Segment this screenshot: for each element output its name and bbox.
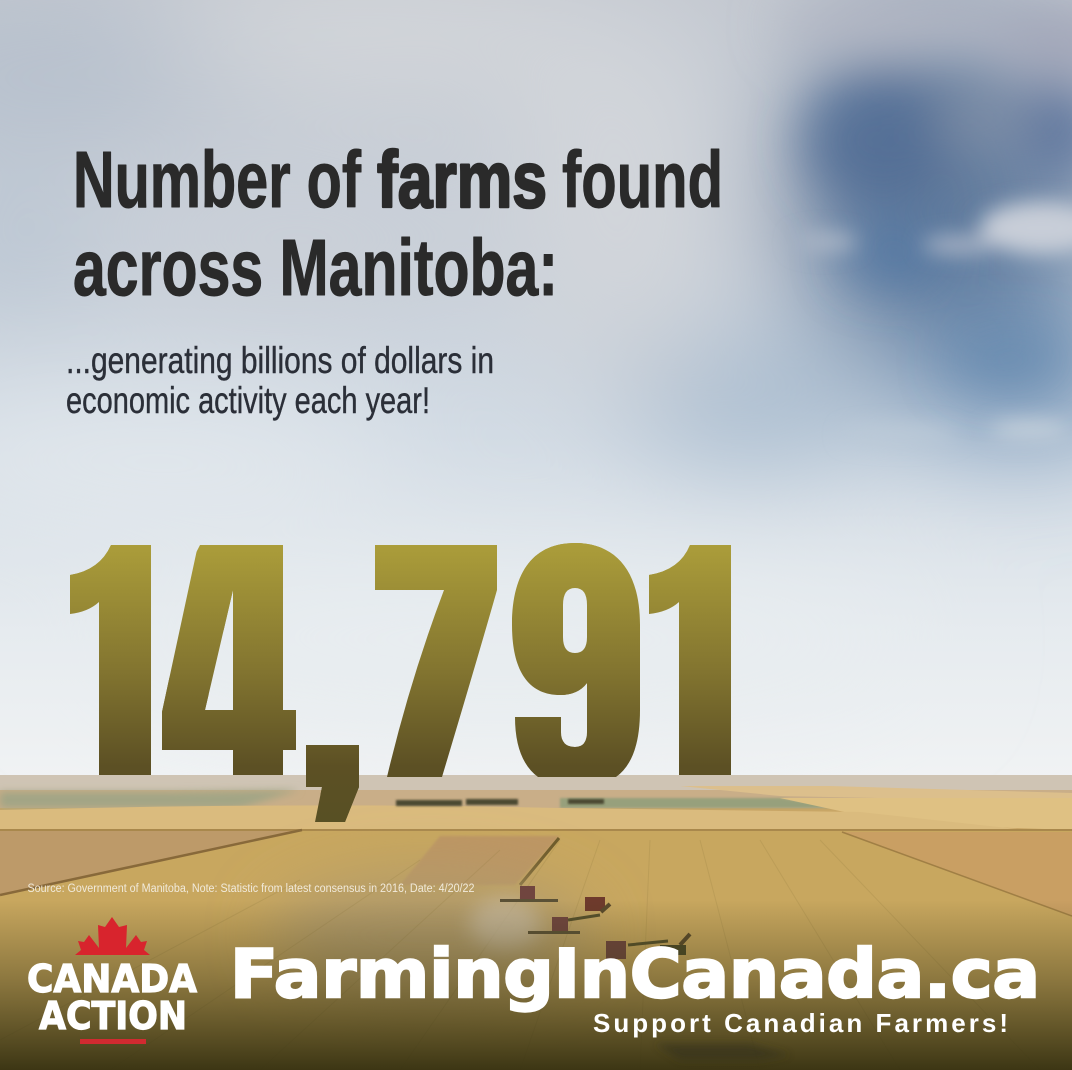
big number 14,791: 1 bbox=[593, 473, 797, 846]
title: farms bbox=[377, 135, 547, 224]
combine harvesters bbox=[500, 886, 690, 959]
icon: red maple leaf bbox=[75, 917, 150, 955]
harvester shadow bbox=[655, 1044, 790, 1060]
big number 14,791: 9 bbox=[504, 474, 649, 846]
logo wordmark bbox=[27, 957, 198, 1038]
harvester dust cloud bbox=[469, 899, 541, 951]
big number 14,791: 1 bbox=[14, 473, 218, 846]
subtitle bbox=[66, 340, 494, 421]
big number 14,791: 4 bbox=[157, 473, 305, 846]
logo wordmark: ACTION bbox=[39, 994, 187, 1038]
tagline: Support Canadian Farmers! bbox=[593, 1008, 1008, 1038]
Canada Action logo bbox=[27, 917, 198, 1044]
background: harvested prairie fields bbox=[0, 775, 1072, 1070]
website name: FarmingInCanada.ca bbox=[230, 935, 1040, 1013]
big number 14,791 bbox=[70, 543, 731, 822]
logo wordmark: CANADA bbox=[27, 957, 198, 1001]
background: dark treeline on horizon bbox=[396, 799, 604, 806]
big number 14,791: , bbox=[286, 494, 402, 867]
title: across Manitoba: bbox=[73, 223, 558, 312]
subtitle: economic activity each year! bbox=[66, 380, 430, 421]
background: sky with clouds bbox=[0, 0, 1072, 790]
subtitle: ...generating billions of dollars in bbox=[66, 340, 494, 381]
bottom dark gradient overlay bbox=[0, 900, 1072, 1070]
title: found bbox=[562, 135, 723, 224]
big number 14,791: 7 bbox=[365, 472, 506, 846]
title: Number of bbox=[73, 135, 361, 224]
red underline bbox=[80, 1039, 146, 1044]
title bbox=[73, 135, 723, 312]
source note: Source: Government of Manitoba, Note: Statistic from latest consensus in 2016, Date: 4/20/22 bbox=[28, 883, 474, 895]
